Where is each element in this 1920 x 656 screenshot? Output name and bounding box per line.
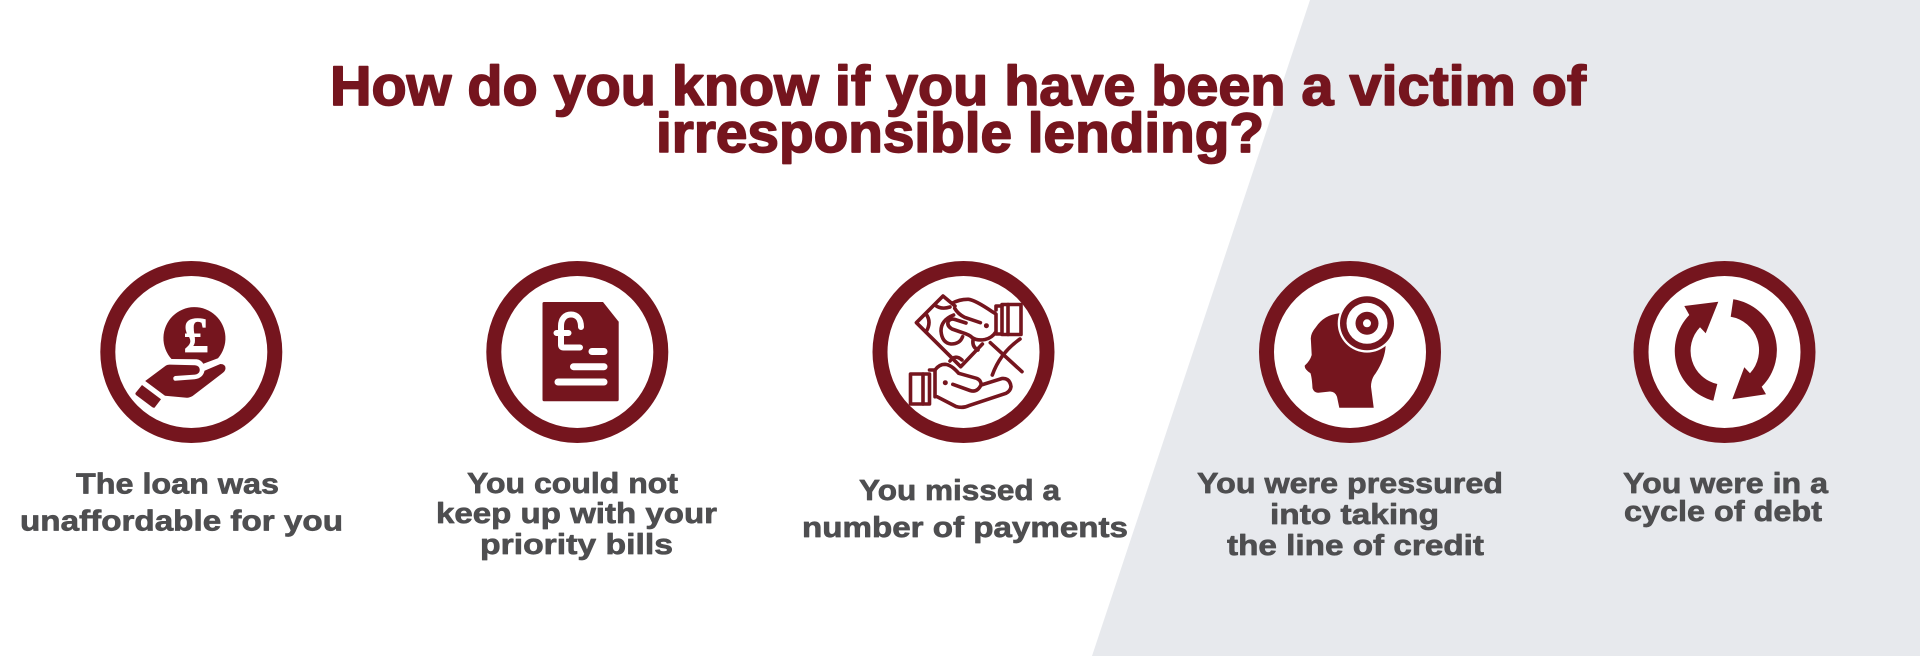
label: into taking (1270, 499, 1439, 531)
diagonal grey background panel (1092, 0, 1920, 656)
label: You were pressured (1197, 468, 1503, 500)
item: cycle of debt (1623, 268, 1829, 528)
label: cycle of debt (1624, 496, 1822, 528)
label: You missed a (859, 475, 1061, 507)
label: number of payments (802, 512, 1128, 544)
title: irresponsible lending? (656, 101, 1264, 164)
icon: hand holding pound coin (108, 268, 275, 436)
label: the line of credit (1227, 530, 1484, 562)
label: You were in a (1623, 468, 1829, 500)
label (1197, 468, 1503, 562)
icon: hands exchanging money with cross (880, 268, 1047, 436)
label: unaffordable for you (20, 506, 343, 538)
icon: pound document (494, 268, 661, 436)
label (436, 468, 717, 561)
label (1623, 468, 1829, 528)
title: How do you know if you have been a victim of (330, 54, 1586, 117)
label (20, 468, 343, 538)
item: pressured into credit (1197, 268, 1503, 562)
item: priority bills (436, 268, 717, 561)
title (330, 54, 1586, 164)
label: You could not (467, 468, 678, 500)
icon: hand holding pound coin: £ (184, 306, 208, 362)
label: priority bills (480, 529, 673, 561)
label (802, 475, 1128, 544)
icon: head with target (1266, 268, 1434, 436)
item: missed payments (802, 268, 1128, 544)
label: keep up with your (436, 498, 717, 530)
label: The loan was (76, 468, 279, 500)
icon: circular arrows (1641, 268, 1808, 436)
item: unaffordable loan (20, 268, 343, 538)
